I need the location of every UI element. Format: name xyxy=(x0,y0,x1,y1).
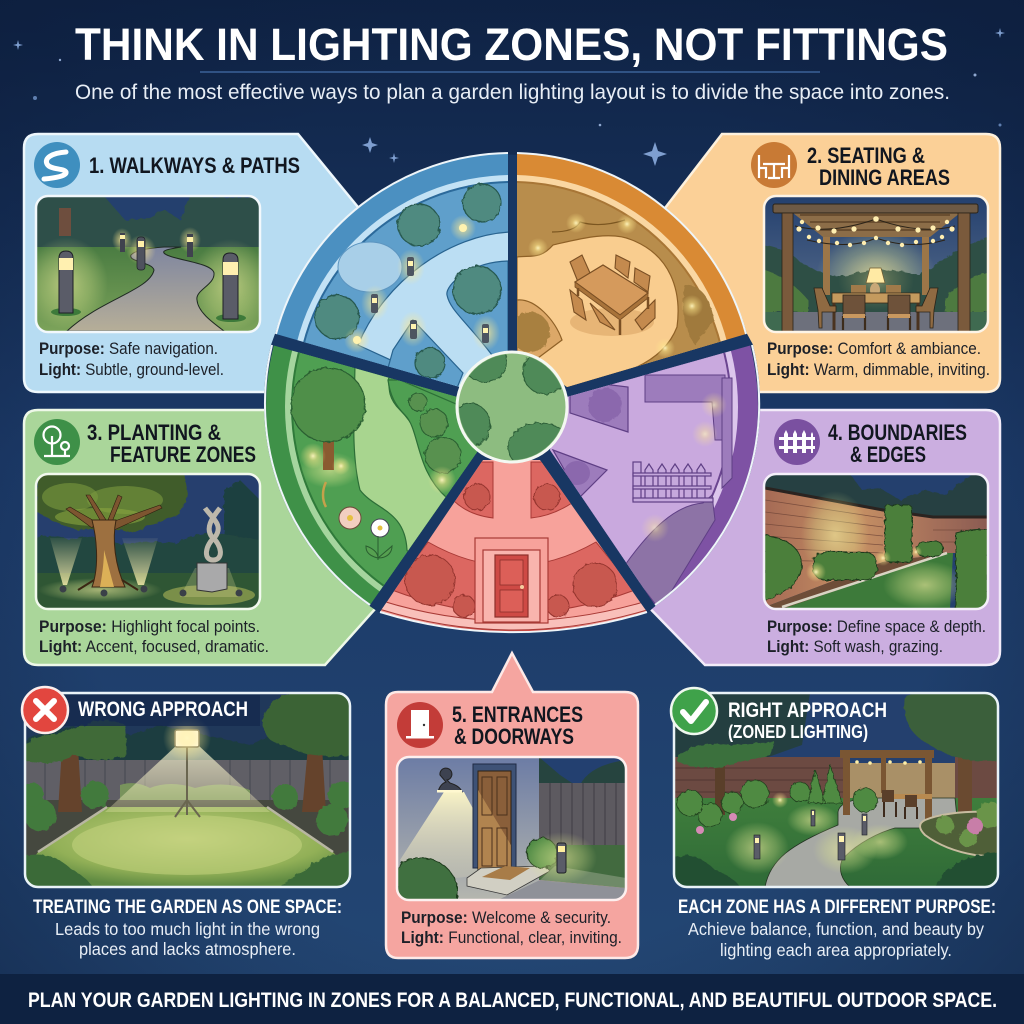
icon: red cross xyxy=(22,687,68,733)
text: purpose and light xyxy=(767,339,990,379)
wheel sector: seating xyxy=(517,154,746,387)
text: purpose and light xyxy=(39,339,224,379)
icon: tree and plant xyxy=(34,419,80,465)
scene frame xyxy=(25,693,350,887)
scene frame xyxy=(397,757,626,900)
heading: entrances: 5. ENTRANCES xyxy=(452,702,583,727)
heading: seating xyxy=(807,143,950,190)
icon: door xyxy=(397,702,443,748)
scene: pergola dining xyxy=(764,196,988,332)
panel: seating and dining xyxy=(662,134,1000,392)
heading: right approach xyxy=(728,699,887,742)
title underline glow xyxy=(200,71,820,73)
heading: planting: 3. PLANTING & xyxy=(87,420,221,445)
text: wrong approach description: places and lacks atmosphere. xyxy=(79,939,296,959)
text: purpose and light: Purpose: Highlight focal points. xyxy=(39,617,260,636)
scene: lit doorway xyxy=(397,757,626,900)
panel: boundaries and edges xyxy=(632,410,1000,665)
scene: washed brick wall xyxy=(764,474,988,609)
heading: planting xyxy=(87,420,256,467)
icon: door in wheel xyxy=(475,538,548,623)
heading: wrong approach: WRONG APPROACH xyxy=(78,698,248,721)
heading: right approach: RIGHT APPROACH xyxy=(728,699,887,722)
text: purpose and light: Light: Soft wash, grazing. xyxy=(767,637,943,656)
wheel sector: walkways xyxy=(276,154,508,387)
text: purpose and light: Light: Subtle, ground-level. xyxy=(39,360,224,379)
heading: entrances xyxy=(452,702,583,749)
title: THINK IN LIGHTING ZONES, NOT FITTINGS xyxy=(75,19,948,70)
text: purpose and light: Purpose: Define space & depth. xyxy=(767,617,986,636)
text: purpose and light: Light: Accent, focused, dramatic. xyxy=(39,637,269,656)
text: purpose and light: Light: Warm, dimmable, inviting. xyxy=(767,360,990,379)
wheel hub xyxy=(456,350,568,464)
wheel sector: entrances xyxy=(380,460,647,632)
text: right approach description xyxy=(678,897,996,960)
panel: wrong approach xyxy=(20,687,356,959)
wheel backing xyxy=(265,156,759,632)
text: wrong approach description: Leads to too much light in the wrong xyxy=(55,919,320,939)
icon: table and chairs xyxy=(751,142,797,188)
footer banner xyxy=(0,974,1024,1024)
scene: lit garden path xyxy=(37,197,259,331)
text: purpose and light xyxy=(401,908,622,947)
icon: green check xyxy=(671,688,717,734)
icon: fence in wheel xyxy=(633,462,713,502)
heading: right approach: (ZONED LIGHTING) xyxy=(728,722,868,742)
icon: dining table in wheel xyxy=(570,255,655,336)
panel: walkways and paths xyxy=(24,134,362,392)
scene: floodlit garden xyxy=(20,693,356,887)
wheel sector: planting xyxy=(266,346,477,605)
heading: seating: 2. SEATING & xyxy=(807,143,925,168)
text: right approach description: Achieve balance, function, and beauty by xyxy=(688,919,984,939)
text: purpose and light: Light: Functional, clear, inviting. xyxy=(401,928,622,947)
heading: boundaries: & EDGES xyxy=(850,442,926,467)
subtitle: One of the most effective ways to plan a garden lighting layout is to divide the space into zones. xyxy=(75,81,950,104)
scene frame xyxy=(764,474,988,609)
heading: seating: DINING AREAS xyxy=(819,165,950,190)
icon: picket fence xyxy=(774,419,820,465)
text: wrong approach description xyxy=(33,897,342,959)
zone wheel xyxy=(265,153,759,653)
text: purpose and light: Purpose: Safe navigation. xyxy=(39,339,218,358)
label band xyxy=(50,695,260,726)
heading: walkways: 1. WALKWAYS & PATHS xyxy=(89,153,300,178)
text: wrong approach description: TREATING THE GARDEN AS ONE SPACE: xyxy=(33,897,342,918)
wheel sector outlines xyxy=(265,153,759,632)
text: purpose and light xyxy=(767,617,986,656)
heading: boundaries xyxy=(828,420,967,467)
scene frame xyxy=(36,474,260,609)
icon: winding path xyxy=(34,142,80,188)
heading: boundaries: 4. BOUNDARIES xyxy=(828,420,967,445)
wheel sector: boundaries xyxy=(550,346,758,605)
panel: right approach xyxy=(671,688,1003,960)
heading: planting: FEATURE ZONES xyxy=(110,442,256,467)
scene frame xyxy=(36,196,260,332)
scene: lit tree and sculpture xyxy=(36,474,260,609)
text: right approach description: lighting each area appropriately. xyxy=(720,940,952,960)
scene frame xyxy=(674,693,998,887)
text: purpose and light: Purpose: Comfort & ambiance. xyxy=(767,339,981,358)
heading: entrances: & DOORWAYS xyxy=(454,724,574,749)
scene: zoned garden lighting xyxy=(674,692,1003,887)
text: purpose and light: Purpose: Welcome & security. xyxy=(401,908,611,927)
panel: planting and feature zones xyxy=(24,410,392,665)
panel: entrances and doorways xyxy=(386,653,638,958)
scene frame xyxy=(764,196,988,332)
text: purpose and light xyxy=(39,617,269,656)
